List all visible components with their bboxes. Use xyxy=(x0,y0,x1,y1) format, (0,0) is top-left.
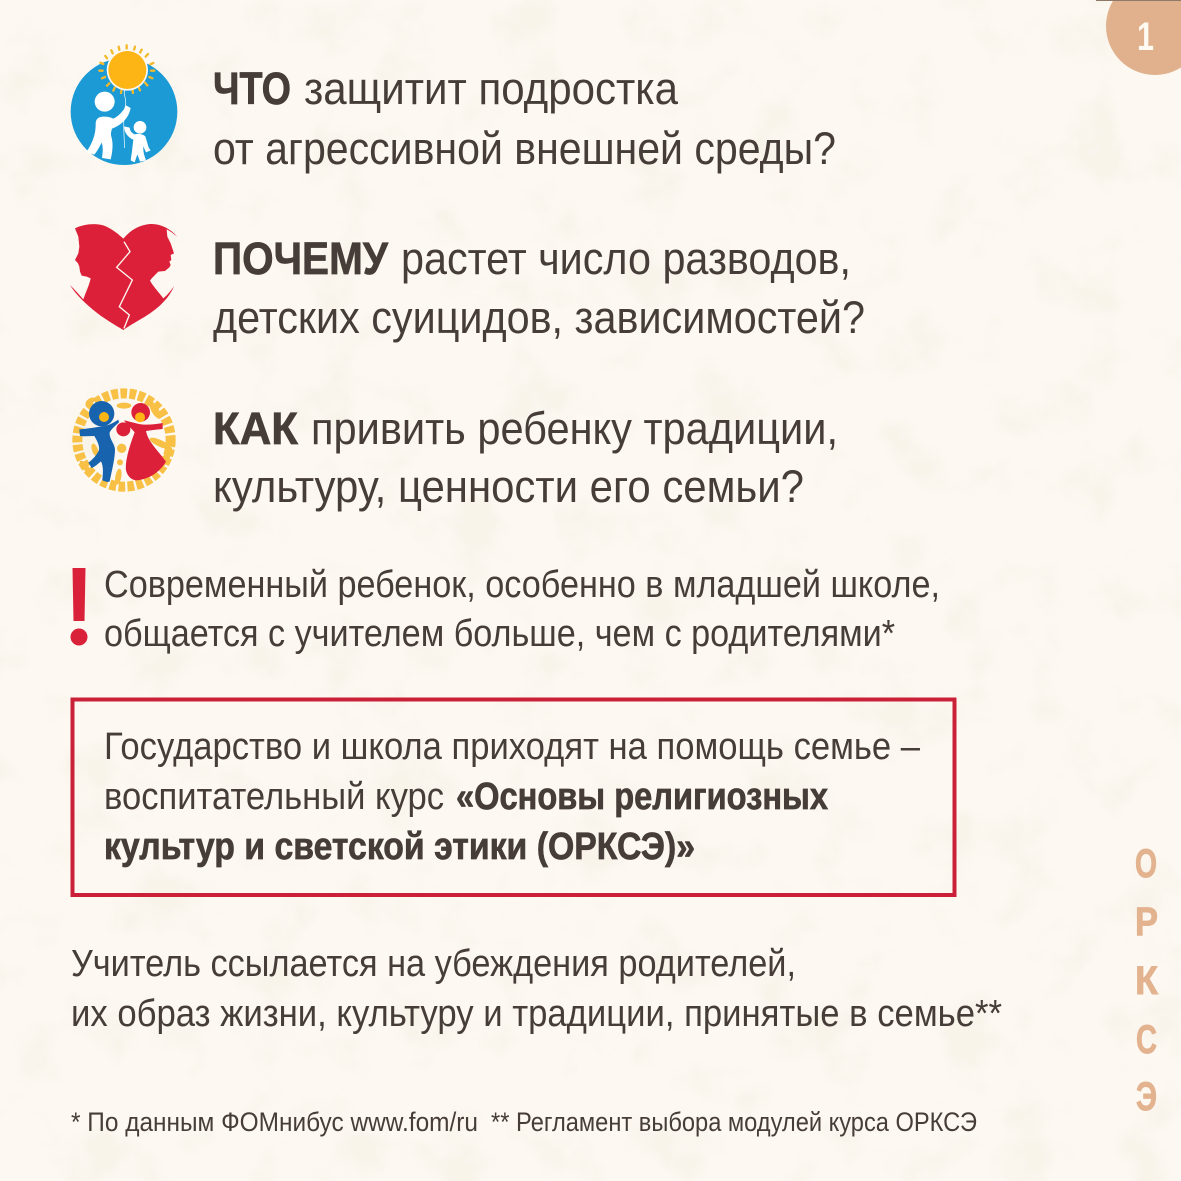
heading: what: от агрессивной внешней среды? xyxy=(213,123,836,174)
callout: course box: Государство и школа приходят на помощь семье – xyxy=(104,726,921,768)
vertical label: ОРКСЭ: С xyxy=(1136,1018,1157,1062)
red figure xyxy=(124,403,166,480)
callout: course box xyxy=(72,700,954,895)
heading: how: привить ребенку традиции, xyxy=(311,403,838,454)
icon: broken heart with profiles xyxy=(70,224,177,330)
icon: exclamation mark xyxy=(70,568,88,646)
heading: why: растет число разводов, xyxy=(401,233,851,284)
heading: how xyxy=(213,403,838,512)
text: teacher note xyxy=(71,943,1002,1035)
footnotes: ** Регламент выбора модулей курса ОРКСЭ xyxy=(491,1107,977,1137)
icon: folk-ornament dancing children xyxy=(77,393,174,487)
vertical label: ОРКСЭ: О xyxy=(1135,842,1157,886)
page number badge: 1 xyxy=(1137,15,1154,59)
footnotes xyxy=(71,1107,977,1137)
vertical label: ОРКСЭ: Э xyxy=(1136,1075,1157,1119)
vertical label: ОРКСЭ: Р xyxy=(1135,900,1158,944)
callout: course box: культур и светской этики (ОРКСЭ)» xyxy=(104,826,695,868)
child figure xyxy=(124,121,151,162)
heading: how: КАК xyxy=(213,403,299,454)
vertical label: ОРКСЭ xyxy=(1135,842,1159,1119)
callout: course box: «Основы религиозных xyxy=(456,776,828,818)
icon: parent and child with sun balloon xyxy=(71,45,177,165)
heading: why: детских суицидов, зависимостей? xyxy=(213,292,865,343)
blue child xyxy=(79,401,119,482)
text: teacher note: Учитель ссылается на убеждения родителей, xyxy=(71,943,796,985)
heading: why xyxy=(213,233,865,343)
text: teacher note: их образ жизни, культуру и традиции, принятые в семье** xyxy=(71,993,1002,1035)
vertical label: ОРКСЭ: К xyxy=(1135,959,1159,1003)
text: modern child note xyxy=(104,564,940,655)
text: modern child note: Современный ребенок, особенно в младшей школе, xyxy=(104,564,940,606)
heading: what xyxy=(213,63,836,174)
heading: why: ПОЧЕМУ xyxy=(213,233,389,284)
footnotes: * По данным ФОМнибус www.fom/ru xyxy=(71,1107,478,1137)
callout: course box: воспитательный курс xyxy=(104,776,444,818)
adult figure xyxy=(86,92,131,159)
heading: what: защитит подростка xyxy=(304,63,679,114)
heading: what: ЧТО xyxy=(213,63,291,114)
heading: how: культуру, ценности его семьи? xyxy=(213,461,804,512)
page number badge xyxy=(1096,0,1181,75)
text: modern child note: общается с учителем больше, чем с родителями* xyxy=(104,613,895,655)
